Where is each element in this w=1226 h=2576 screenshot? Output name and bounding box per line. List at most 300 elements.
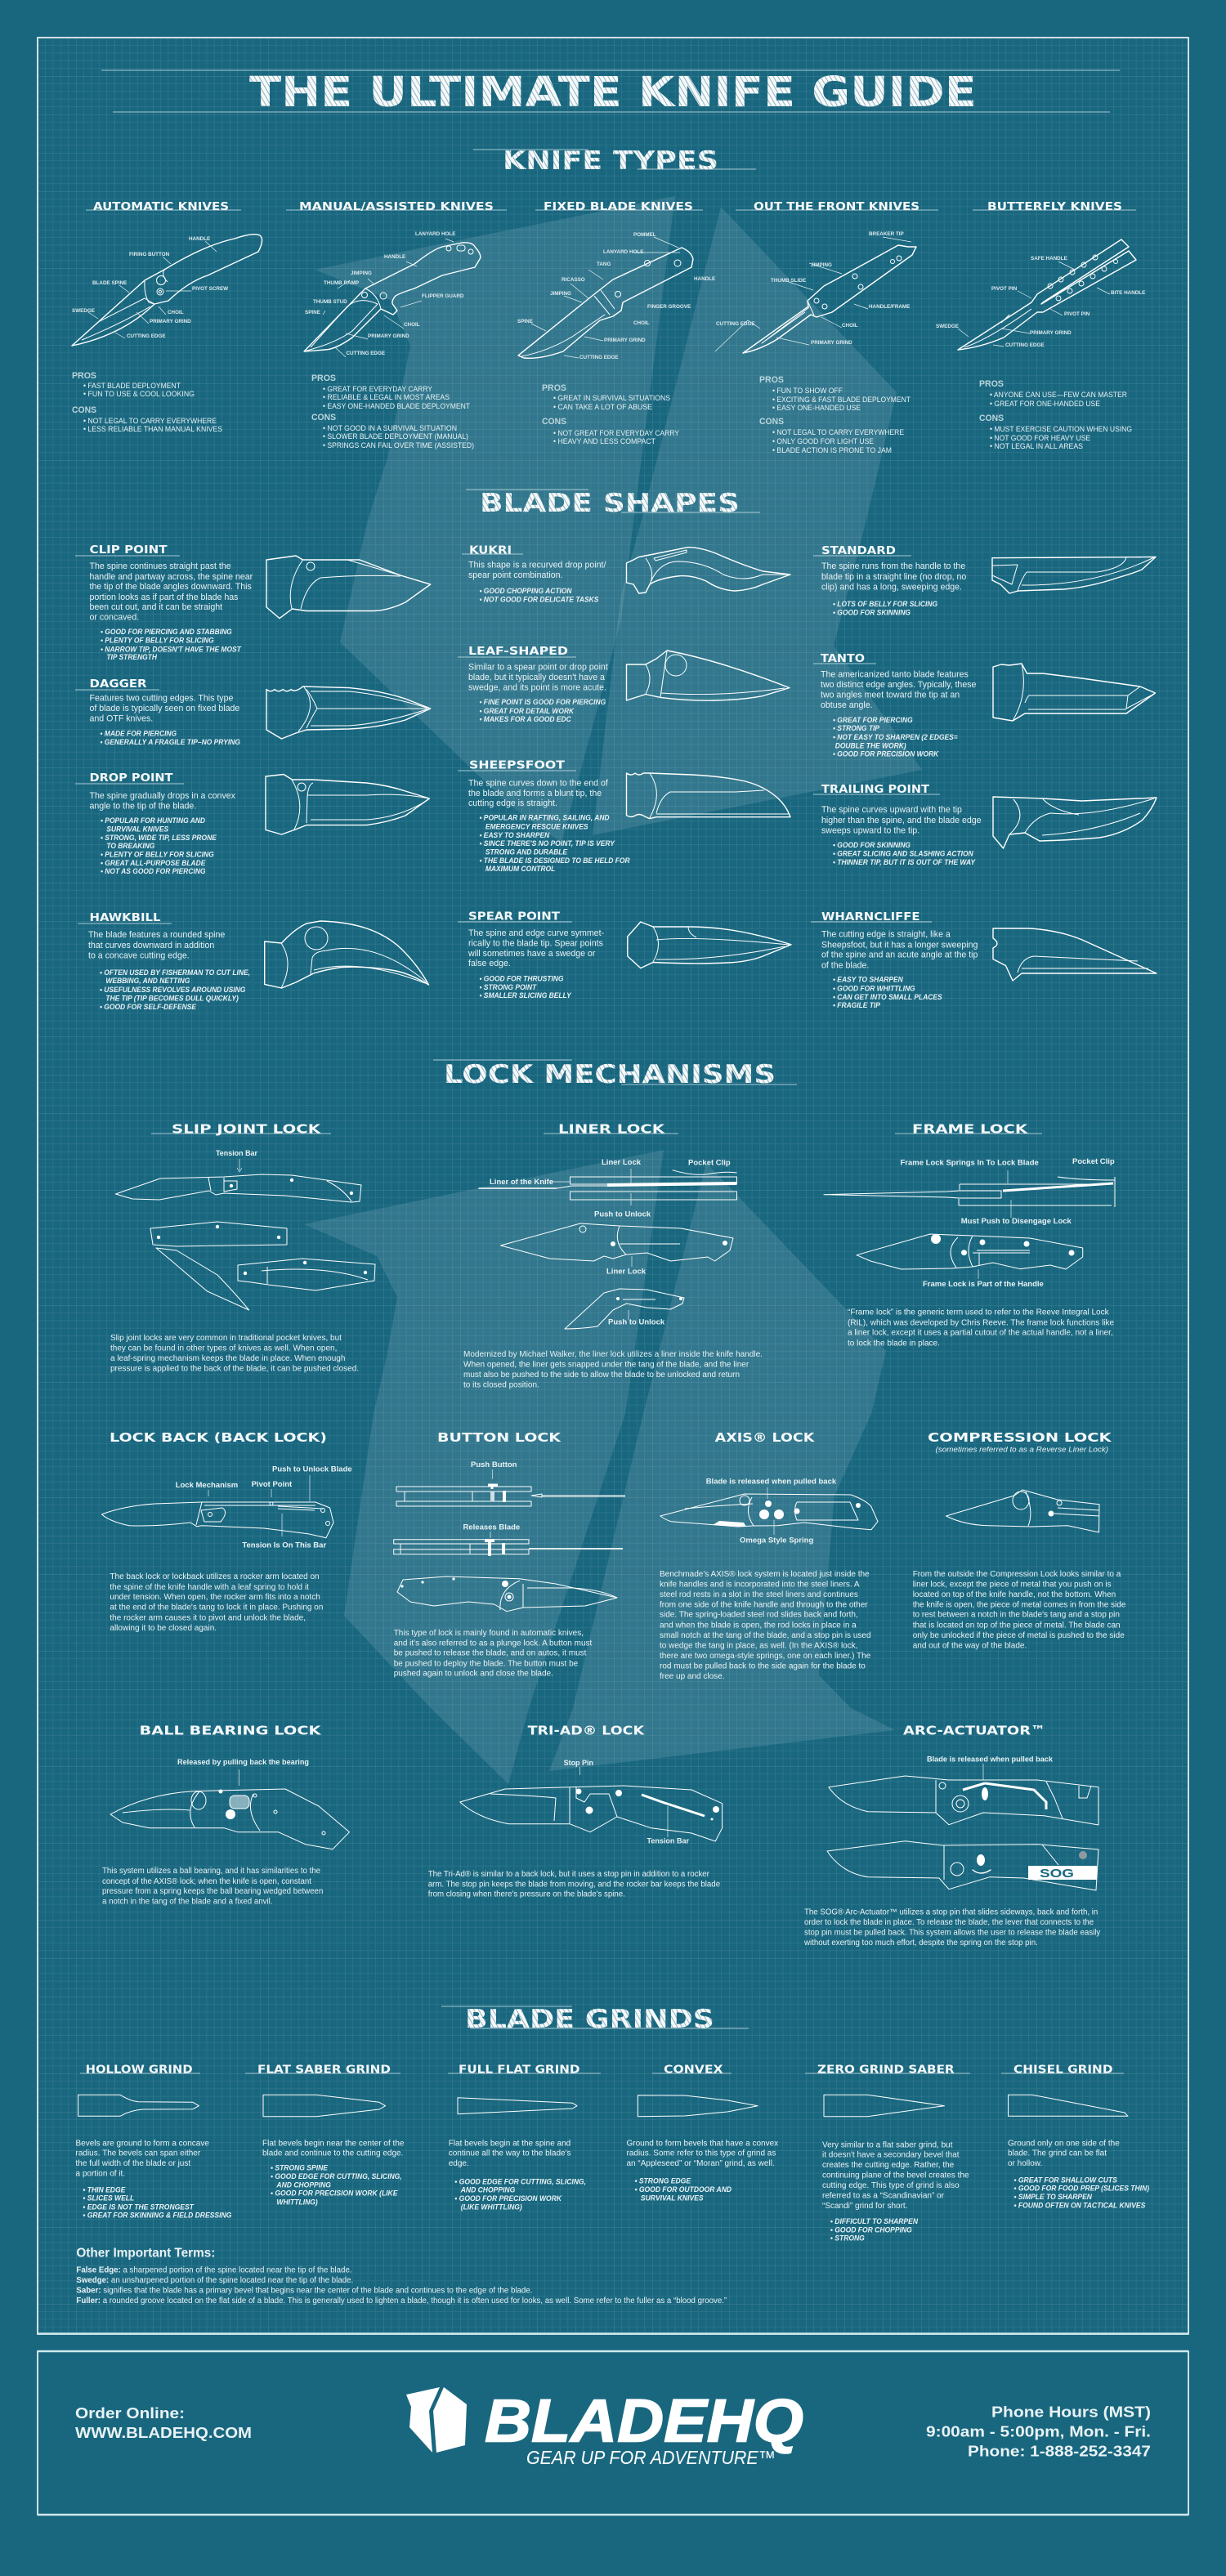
heading: KUKRI bbox=[469, 544, 512, 557]
description: to its closed position. bbox=[463, 1381, 539, 1390]
description: (RIL), which was developed by Chris Reeve. The frame lock functions like bbox=[848, 1318, 1115, 1327]
description: be pushed to deploy the blade. The button must be bbox=[394, 1659, 579, 1668]
description: to a concave cutting edge. bbox=[88, 950, 190, 960]
panel: hawkbill bbox=[78, 912, 428, 1011]
knife part labels: HANDLE bbox=[694, 276, 715, 282]
bullet list: • GENERALLY A FRAGILE TIP–NO PRYING bbox=[100, 738, 240, 746]
knife part labels: CUTTING EDGE bbox=[716, 321, 755, 327]
description: only be unlocked if the piece of metal is pushed to the side bbox=[913, 1631, 1125, 1640]
bullet list: • GOOD FOR CHOPPING bbox=[830, 2225, 912, 2234]
pros and cons: • GREAT IN SURVIVAL SITUATIONS bbox=[553, 394, 670, 402]
liner lock labels: Pocket Clip bbox=[688, 1159, 731, 1168]
knife part labels: HANDLE bbox=[189, 236, 210, 242]
knife part labels: CUTTING EDGE bbox=[1005, 342, 1045, 348]
definitions bbox=[76, 2266, 727, 2305]
bullet list: • GOOD FOR WHITTLING bbox=[833, 984, 915, 992]
description bbox=[821, 805, 982, 835]
description: The back lock or lockback utilizes a rocker arm located on bbox=[110, 1572, 320, 1581]
bullet list: • GREAT FOR DETAIL WORK bbox=[479, 706, 575, 715]
description: under tension. When open, the rocker arm fits into a notch bbox=[110, 1593, 320, 1602]
pros and cons: • EXCITING & FAST BLADE DEPLOYMENT bbox=[772, 396, 911, 404]
description: a portion of it. bbox=[75, 2170, 125, 2179]
description: This type of lock is mainly found in automatic knives, bbox=[394, 1629, 584, 1638]
bullet list: • PLENTY OF BELLY FOR SLICING bbox=[101, 636, 214, 645]
description: free up and close. bbox=[660, 1672, 724, 1681]
knife part labels: LANYARD HOLE bbox=[415, 231, 455, 237]
bullet list: • EDGE IS NOT THE STRONGEST bbox=[83, 2203, 195, 2211]
lock back labels: Push to Unlock Blade bbox=[272, 1465, 352, 1474]
top view engaged bbox=[396, 1469, 625, 1506]
description: portion looks as if part of the blade has bbox=[90, 593, 238, 602]
heading: COMPRESSION LOCK bbox=[928, 1430, 1112, 1445]
knife top view bbox=[479, 1169, 737, 1205]
description: of blade is typically seen on fixed blade bbox=[90, 704, 239, 713]
pros and cons: • ONLY GOOD FOR LIGHT USE bbox=[772, 437, 874, 445]
bullet list bbox=[100, 729, 240, 746]
description: from one side of the knife handle and through to the other bbox=[660, 1600, 868, 1609]
heading: LEAF-SHAPED bbox=[468, 646, 568, 658]
description bbox=[262, 2139, 405, 2158]
tagline: GEAR UP FOR ADVENTURE™ bbox=[526, 2447, 776, 2468]
description: cutting edge. This type of grind is also bbox=[822, 2181, 960, 2190]
pros and cons bbox=[311, 373, 474, 449]
knife diagram bbox=[101, 1475, 333, 1538]
description bbox=[913, 1570, 1126, 1650]
description: clip) and has a long, sweeping edge. bbox=[821, 582, 962, 592]
knife part labels: BREAKER TIP bbox=[869, 231, 904, 237]
pros and cons: CONS bbox=[72, 405, 96, 415]
description: they can be found in other types of knives as well. When open, bbox=[110, 1344, 337, 1353]
description: concept of the AXIS® lock; when the knife is open, constant bbox=[102, 1877, 311, 1886]
description: a notch in the tang of the blade and a fixed anvil. bbox=[102, 1898, 272, 1907]
description: referred to as a “Scandinavian” or bbox=[822, 2192, 945, 2201]
panel: button lock bbox=[394, 1430, 625, 1679]
description: there are two omega-style springs, one on each liner.) The bbox=[660, 1652, 871, 1661]
description: Ground to form bevels that have a convex bbox=[626, 2139, 778, 2148]
bullet list: • CAN GET INTO SMALL PLACES bbox=[833, 993, 942, 1001]
description: the rocker arm causes it to pivot and unlock the blade, bbox=[110, 1613, 306, 1622]
order online text: WWW.BLADEHQ.COM bbox=[75, 2425, 252, 2441]
heading: LINER LOCK bbox=[558, 1122, 665, 1137]
pros and cons: • NOT LEGAL IN ALL AREAS bbox=[990, 442, 1083, 450]
description: or hollow. bbox=[1008, 2159, 1042, 2168]
description: arm. The stop pin keeps the blade from moving, and the rocker bar keeps the blade bbox=[428, 1880, 720, 1889]
heading: knife types bbox=[473, 146, 756, 176]
pros and cons: CONS bbox=[759, 417, 784, 427]
bullet list bbox=[833, 975, 942, 1009]
blade illustration bbox=[266, 775, 429, 834]
bullet list: • GOOD EDGE FOR CUTTING, SLICING, bbox=[454, 2177, 586, 2185]
knife open bbox=[500, 1223, 733, 1267]
heading: BALL BEARING LOCK bbox=[139, 1723, 322, 1737]
description bbox=[848, 1308, 1115, 1348]
knife part labels: SPINE bbox=[305, 310, 320, 315]
heading: TANTO bbox=[821, 653, 865, 665]
bullet list: • THIN EDGE bbox=[83, 2185, 126, 2194]
bullet list: • NARROW TIP, DOESN'T HAVE THE MOST bbox=[101, 645, 242, 653]
pros and cons: • MUST EXERCISE CAUTION WHEN USING bbox=[990, 425, 1132, 433]
bullet list: THE TIP (TIP BECOMES DULL QUICKLY) bbox=[105, 994, 239, 1003]
bullet list: • GREAT FOR SKINNING & FIELD DRESSING bbox=[83, 2211, 231, 2219]
description: false edge. bbox=[468, 959, 511, 968]
description: Flat bevels begin at the spine and bbox=[449, 2139, 570, 2148]
heading: OUT THE FRONT KNIVES bbox=[754, 201, 920, 213]
definitions: False Edge: a sharpened portion of the spine located near the tip of the blade. bbox=[76, 2266, 352, 2275]
bullet list: • PLENTY OF BELLY FOR SLICING bbox=[101, 850, 214, 859]
description: pressure is applied to the back of the blade, it can be pushed closed. bbox=[110, 1364, 359, 1373]
description bbox=[468, 778, 608, 808]
bullet list bbox=[479, 974, 572, 1000]
description: and when the blade is open, the rod locks in place in a bbox=[660, 1621, 857, 1630]
description: rically to the blade tip. Spear points bbox=[468, 938, 603, 948]
heading: blade shapes: BLADE SHAPES bbox=[480, 489, 740, 518]
description: a liner lock, except it uses a partial cutout of the actual handle, not a liner, bbox=[848, 1329, 1113, 1338]
description: from closing when there's pressure on the blade's spine. bbox=[428, 1890, 625, 1899]
description: of the blade. bbox=[821, 960, 869, 970]
pros and cons: • NOT LEGAL TO CARRY EVERYWHERE bbox=[772, 428, 904, 436]
description: the knife is open, the piece of metal comes in from the side bbox=[913, 1600, 1126, 1609]
tri-ad labels: Stop Pin bbox=[564, 1759, 593, 1768]
description: sweeps upward to the tip. bbox=[821, 825, 920, 835]
blade illustration bbox=[992, 557, 1156, 593]
heading: FIXED BLADE KNIVES bbox=[544, 201, 693, 213]
description: knife handles and is incorporated into the steel liners. A bbox=[660, 1580, 860, 1589]
description: continue all the way to the blade's bbox=[449, 2149, 570, 2158]
bullet list: • STRONG POINT bbox=[479, 983, 538, 991]
knife part labels: JIMPING bbox=[550, 291, 571, 297]
description: Ground only on one side of the bbox=[1008, 2139, 1120, 2148]
title bbox=[101, 69, 1120, 117]
pros and cons bbox=[759, 375, 911, 454]
description: pushed again to unlock and close the blade. bbox=[394, 1670, 553, 1679]
panel: slip joint lock bbox=[110, 1122, 375, 1373]
description bbox=[803, 1907, 1100, 1948]
callout: Released by pulling back the bearing bbox=[177, 1758, 309, 1767]
knife part labels: THUMB RAMP bbox=[324, 280, 359, 286]
bullet list: • POPULAR FOR HUNTING AND bbox=[101, 816, 206, 825]
heading: LOCK BACK (BACK LOCK) bbox=[110, 1430, 327, 1445]
description bbox=[449, 2139, 570, 2168]
knife part labels bbox=[72, 236, 228, 339]
description: Bevels are ground to form a concave bbox=[75, 2139, 209, 2148]
description: to wedge the tang in place, as well. (In the AXIS® lock, bbox=[660, 1641, 858, 1650]
heading: DROP POINT bbox=[90, 772, 173, 785]
pros and cons: PROS bbox=[979, 379, 1004, 389]
panel: wharncliffe bbox=[811, 911, 1157, 1009]
bullet list: • NOT GOOD FOR DELICATE TASKS bbox=[479, 595, 598, 603]
order online text: Order Online: bbox=[75, 2405, 185, 2422]
bullet list: • LOTS OF BELLY FOR SLICING bbox=[833, 600, 937, 608]
bullet list: EMERGENCY RESCUE KNIVES bbox=[485, 822, 588, 830]
description: and it's also referred to as a plunge lock. A button must bbox=[394, 1639, 593, 1648]
panel: automatic knives bbox=[72, 201, 262, 433]
liner lock labels bbox=[490, 1158, 731, 1327]
knife part labels: POMMEL bbox=[633, 232, 656, 238]
description: Sheepsfoot, but it has a longer sweeping bbox=[821, 940, 978, 950]
knife half open bbox=[150, 1222, 287, 1310]
heading bbox=[458, 910, 572, 923]
grind profile bbox=[824, 2095, 945, 2117]
bullet list: • MAKES FOR A GOOD EDC bbox=[479, 715, 571, 723]
pros and cons bbox=[72, 371, 222, 433]
knife diagram bbox=[460, 1786, 723, 1841]
description: The spine curves down to the end of bbox=[468, 778, 608, 788]
description: This system utilizes a ball bearing, and it has similarities to the bbox=[102, 1867, 320, 1876]
bullet list bbox=[101, 628, 242, 661]
heading: BUTTERFLY KNIVES bbox=[987, 201, 1122, 213]
panel: lock back bbox=[101, 1430, 352, 1633]
description: “Scandi” grind for short. bbox=[822, 2202, 907, 2211]
bullet list: • GOOD FOR THRUSTING bbox=[479, 974, 564, 983]
pros and cons: • SLOWER BLADE DEPLOYMENT (MANUAL) bbox=[323, 432, 468, 441]
bullet list: • GREAT FOR PIERCING bbox=[833, 716, 913, 724]
pros and cons: PROS bbox=[542, 383, 566, 393]
knife diagram bbox=[304, 239, 481, 357]
description: liner lock, except the piece of metal that you push on is bbox=[913, 1580, 1112, 1589]
bullet list: • STRONG EDGE bbox=[634, 2176, 691, 2185]
panel: flat saber grind bbox=[245, 2064, 405, 2206]
description bbox=[110, 1334, 359, 1373]
knife diagram bbox=[397, 1576, 617, 1612]
description bbox=[102, 1867, 323, 1907]
knife part labels: TANG bbox=[597, 262, 611, 267]
bullet list: AND CHOPPING bbox=[460, 2185, 515, 2194]
description: swedge, and its point is more acute. bbox=[468, 682, 606, 692]
heading bbox=[652, 2064, 732, 2077]
heading: SHEEPSFOOT bbox=[469, 759, 565, 771]
lock back labels bbox=[176, 1465, 352, 1550]
bullet list: • GOOD FOR OUTDOOR AND bbox=[634, 2185, 732, 2194]
frame lock labels: Frame Lock is Part of the Handle bbox=[923, 1280, 1044, 1289]
logo wordmark: BLADEHQ bbox=[485, 2386, 803, 2454]
knife part labels: HANDLE bbox=[384, 254, 405, 260]
description: obtuse angle. bbox=[821, 700, 873, 710]
bullet list: AND CHOPPING bbox=[275, 2180, 331, 2189]
pros and cons: • LESS RELIABLE THAN MANUAL KNIVES bbox=[83, 425, 222, 433]
description: The spine and edge curve symmet- bbox=[468, 928, 605, 938]
pros and cons: • EASY ONE-HANDED BLADE DEPLOYMENT bbox=[323, 402, 470, 410]
panel: axis lock bbox=[660, 1430, 878, 1681]
logo mark bbox=[406, 2387, 467, 2453]
description: The Tri-Ad® is similar to a back lock, but it uses a stop pin in addition to a rocker bbox=[428, 1870, 710, 1879]
bullet list: • NOT AS GOOD FOR PIERCING bbox=[101, 867, 206, 875]
heading: STANDARD bbox=[821, 545, 896, 557]
knife part labels: THUMB SLIDE bbox=[771, 278, 806, 284]
callout: Blade is released when pulled back bbox=[927, 1755, 1054, 1764]
liner lock labels: Push to Unlock bbox=[594, 1210, 651, 1219]
knife closed bbox=[238, 1259, 375, 1290]
bullet list: SURVIVAL KNIVES bbox=[641, 2194, 704, 2202]
heading: WHARNCLIFFE bbox=[821, 911, 920, 924]
blade illustration bbox=[626, 651, 790, 700]
bullet list: • EASY TO SHARPEN bbox=[833, 975, 903, 984]
grind profile bbox=[638, 2095, 758, 2117]
knife part labels: CUTTING EDGE bbox=[127, 333, 166, 339]
description: two distinct edge angles. Typically, these bbox=[821, 680, 977, 690]
bullet list bbox=[833, 840, 976, 866]
bullet list bbox=[479, 587, 598, 603]
bullet list: • POPULAR IN RAFTING, SAILING, AND bbox=[479, 813, 610, 822]
heading bbox=[78, 912, 172, 924]
description: will sometimes have a swedge or bbox=[468, 949, 596, 959]
heading bbox=[813, 545, 911, 557]
callout: tension bar bbox=[216, 1149, 257, 1172]
bullet list: • GREAT FOR SHALLOW CUTS bbox=[1013, 2176, 1117, 2184]
description: blade tip in a straight line (no drop, no bbox=[821, 572, 966, 582]
bullet list: • GREAT ALL-PURPOSE BLADE bbox=[101, 859, 206, 867]
panel: trailing point bbox=[813, 784, 1157, 866]
panel: fixed blade knives bbox=[517, 201, 715, 445]
bullet list: MAXIMUM CONTROL bbox=[485, 865, 555, 873]
bullet list bbox=[833, 716, 958, 758]
description bbox=[428, 1870, 720, 1899]
bullet list bbox=[833, 600, 937, 617]
description: without exerting too much effort, despite the spring on the stop pin. bbox=[803, 1939, 1038, 1948]
description: “Frame lock” is the generic term used to refer to the Reeve Integral Lock bbox=[848, 1308, 1110, 1317]
heading: DAGGER bbox=[90, 678, 147, 691]
description bbox=[822, 2140, 969, 2211]
description bbox=[90, 561, 253, 623]
knife part labels: THUMB STUD bbox=[313, 299, 347, 305]
description: to rest between a notch in the blade's tang and a stop pin bbox=[913, 1611, 1120, 1620]
bullet list: • THE BLADE IS DESIGNED TO BE HELD FOR bbox=[479, 856, 630, 865]
bullet list: • GOOD FOR PIERCING AND STABBING bbox=[101, 628, 232, 636]
phone hours: Phone: 1-888-252-3347 bbox=[968, 2444, 1151, 2460]
description bbox=[626, 2139, 778, 2168]
description: that curves downward in addition bbox=[88, 941, 214, 950]
bullet list: • GOOD CHOPPING ACTION bbox=[479, 587, 572, 595]
heading bbox=[75, 772, 184, 785]
knife open bbox=[857, 1234, 1083, 1279]
knife part labels: BLADE SPINE bbox=[92, 280, 127, 286]
description: angle to the tip of the blade. bbox=[90, 801, 196, 811]
panel: ball bearing lock bbox=[102, 1723, 350, 1907]
bullet list: STRONG AND DURABLE bbox=[485, 847, 568, 856]
knife part labels: CUTTING EDGE bbox=[579, 355, 619, 360]
bullet list: • NOT EASY TO SHARPEN (2 EDGES= bbox=[833, 733, 958, 741]
pros and cons: • CAN TAKE A LOT OF ABUSE bbox=[553, 403, 652, 411]
pros and cons: PROS bbox=[311, 373, 336, 383]
pros and cons: • NOT GOOD IN A SURVIVAL SITUATION bbox=[323, 424, 457, 432]
bullet list: • SLICES WELL bbox=[83, 2194, 134, 2203]
bullet list: • GOOD FOR PRECISION WORK bbox=[833, 749, 939, 758]
liner lock labels: Liner of the Knife bbox=[490, 1178, 553, 1187]
title: THE ULTIMATE KNIFE GUIDE bbox=[249, 69, 977, 117]
grind profile bbox=[1009, 2095, 1128, 2116]
description: The blade features a rounded spine bbox=[88, 930, 225, 940]
heading: HAWKBILL bbox=[90, 912, 160, 924]
bullet list: SURVIVAL KNIVES bbox=[106, 825, 168, 834]
pros and cons: • NOT GOOD FOR HEAVY USE bbox=[990, 434, 1090, 442]
knife closed view with logo bbox=[827, 1841, 1098, 1890]
knife half closed bbox=[565, 1289, 684, 1329]
description: creates the cutting edge. Rather, the bbox=[822, 2161, 955, 2170]
knife closed view with logo: SOG bbox=[1040, 1867, 1074, 1881]
bullet list: • EASY TO SHARPEN bbox=[479, 831, 550, 839]
heading: HOLLOW GRIND bbox=[86, 2064, 193, 2077]
description bbox=[110, 1572, 323, 1633]
grind profile bbox=[458, 2098, 577, 2114]
panel: standard bbox=[813, 545, 1156, 617]
description: it doesn't have a secondary bevel that bbox=[822, 2151, 960, 2160]
knife part labels: SWEDGE bbox=[936, 324, 959, 329]
blade illustration bbox=[265, 921, 428, 988]
panel: out the front knives bbox=[715, 201, 938, 454]
knife part labels: RICASSO bbox=[562, 277, 585, 283]
panel: full flat grind bbox=[448, 2064, 601, 2211]
heading: BUTTON LOCK bbox=[437, 1430, 562, 1445]
description: be pushed to release the blade, and on autos, it must bbox=[394, 1649, 587, 1658]
description: The SOG® Arc-Actuator™ utilizes a stop pin that slides sideways, back and forth, in bbox=[804, 1907, 1098, 1916]
knife part labels: FLIPPER GUARD bbox=[422, 293, 464, 299]
panel: dagger bbox=[75, 678, 431, 746]
bullet list: TIP STRENGTH bbox=[106, 653, 158, 661]
bullet list: • STRONG, WIDE TIP, LESS PRONE bbox=[101, 834, 217, 842]
bullet list bbox=[479, 813, 630, 873]
bullet list: • USEFULNESS REVOLVES AROUND USING bbox=[100, 986, 245, 994]
knife inner view bbox=[829, 1776, 1098, 1825]
bullet list: • FRAGILE TIP bbox=[833, 1001, 880, 1009]
description: must also be pushed to the side to allow the blade to be unlocked and return bbox=[463, 1371, 740, 1380]
description bbox=[468, 662, 608, 692]
knife open bbox=[116, 1174, 361, 1202]
description: the spine of the knife handle with a leaf spring to hold it bbox=[110, 1583, 309, 1592]
blade illustration bbox=[266, 686, 431, 739]
pros and cons: CONS bbox=[542, 417, 566, 427]
frame lock labels: Frame Lock Springs In To Lock Blade bbox=[901, 1159, 1039, 1168]
description bbox=[1008, 2139, 1120, 2168]
knife diagram bbox=[660, 1487, 878, 1535]
knife part labels: JIMPING bbox=[351, 271, 372, 276]
knife part labels: HANDLE/FRAME bbox=[869, 304, 910, 310]
knife diagram bbox=[72, 235, 262, 346]
bullet list: • GOOD FOR PRECISION WORK bbox=[454, 2194, 562, 2203]
description: The americanized tanto blade features bbox=[821, 670, 969, 680]
heading bbox=[75, 678, 159, 691]
heading: blade grinds bbox=[441, 2005, 749, 2034]
panel: tri-ad lock bbox=[428, 1723, 723, 1899]
panel: chisel grind bbox=[1001, 2064, 1149, 2210]
description: This shape is a recurved drop point/ bbox=[468, 561, 606, 570]
knife part labels: PRIMARY GRIND bbox=[150, 319, 191, 324]
heading: ZERO GRIND SABER bbox=[817, 2064, 955, 2077]
knife diagram bbox=[110, 1789, 350, 1849]
description: blade and continue to the cutting edge. bbox=[262, 2149, 403, 2158]
description: at the end of the blade's tang to lock it in place. Pushing on bbox=[110, 1603, 323, 1612]
description bbox=[821, 561, 966, 592]
description bbox=[90, 791, 236, 811]
knife diagram bbox=[946, 1490, 1099, 1532]
watermark: blade logo lower bbox=[304, 1150, 895, 1784]
liner lock labels: Liner Lock bbox=[602, 1158, 642, 1167]
heading: CONVEX bbox=[664, 2064, 723, 2077]
pros and cons: • GREAT FOR EVERYDAY CARRY bbox=[323, 385, 432, 393]
knife part labels bbox=[716, 231, 910, 346]
pros and cons: CONS bbox=[979, 414, 1004, 423]
bullet list: • MADE FOR PIERCING bbox=[100, 729, 177, 738]
description: Similar to a spear point or drop point bbox=[468, 662, 608, 672]
bullet list: WEBBING, AND NETTING bbox=[105, 977, 190, 985]
knife part labels: FIRING BUTTON bbox=[129, 252, 170, 257]
definitions: Saber: signifies that the blade has a primary bevel that begins near the center of the blade and continues to the edge of the blade. bbox=[76, 2286, 532, 2295]
panel: arc-actuator bbox=[803, 1723, 1100, 1948]
pros and cons: • NOT LEGAL TO CARRY EVERYWHERE bbox=[83, 417, 217, 425]
panel: sheepsfoot bbox=[458, 759, 790, 873]
knife part labels: PRIMARY GRIND bbox=[1030, 330, 1072, 336]
description: an “Appleseed” or “Moran” grind, as well. bbox=[626, 2159, 775, 2168]
panel: tanto bbox=[813, 653, 1156, 758]
button lock labels: Releases Blade bbox=[463, 1523, 520, 1532]
